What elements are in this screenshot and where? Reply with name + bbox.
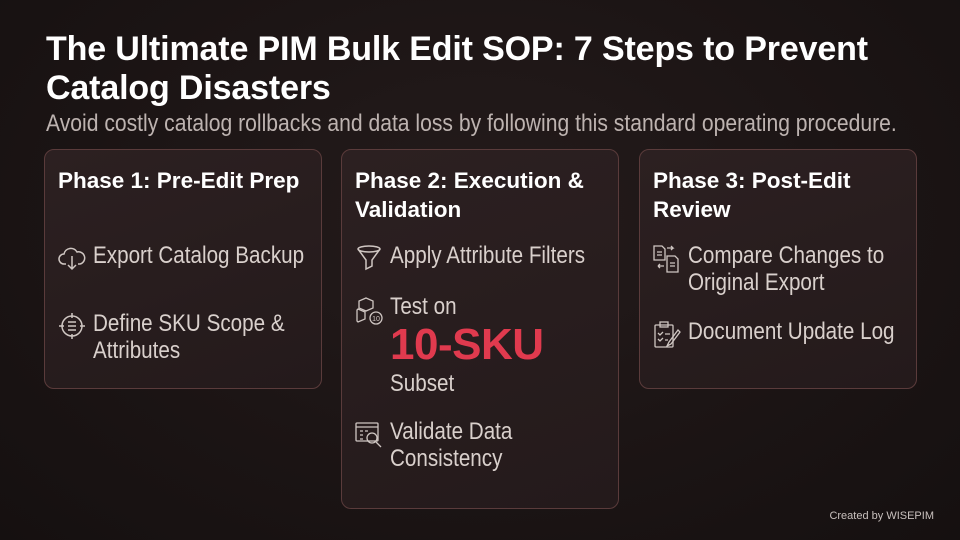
item: apply attribute filters: Apply Attribute Filters <box>390 242 585 269</box>
heading: phase 3 <box>653 168 851 222</box>
panel: phase 1 <box>44 149 322 389</box>
item: define sku scope: Attributes <box>93 337 180 364</box>
item: test on 10-SKU subset: Test on <box>390 293 457 320</box>
panel: phase 2 <box>341 149 619 509</box>
item: document update log: Document Update Log <box>688 318 895 345</box>
heading: phase 1: Phase 1: Pre-Edit Prep <box>58 168 299 193</box>
icon: target list <box>59 313 85 339</box>
item: validate data consistency <box>355 418 512 472</box>
heading: phase 3: Review <box>653 197 731 222</box>
item: define sku scope: Define SKU Scope & <box>93 310 285 337</box>
item: compare changes: Compare Changes to <box>688 242 884 269</box>
item: validate data consistency: Consistency <box>390 445 502 472</box>
icon: cloud download <box>58 248 86 270</box>
item: test on 10-SKU subset <box>356 293 544 397</box>
icon: compare documents <box>653 245 679 273</box>
item: export catalog backup: Export Catalog Backup <box>93 242 304 269</box>
credit: Created by WISEPIM <box>829 510 934 522</box>
item: compare changes <box>653 242 884 296</box>
icon: funnel <box>357 245 381 270</box>
icon: table magnifier <box>355 422 382 448</box>
item: test on 10-SKU subset: Subset <box>390 370 454 397</box>
icon: boxes 10 <box>356 297 383 325</box>
heading: phase 2: Phase 2: Execution & <box>355 168 584 193</box>
title: The Ultimate PIM Bulk Edit SOP: 7 Steps to Prevent <box>46 30 868 68</box>
title: Catalog Disasters <box>46 69 331 107</box>
subtitle: Avoid costly catalog rollbacks and data loss by following this standard operating procedure. <box>46 110 897 137</box>
icon: boxes 10: 10 <box>372 316 380 323</box>
title <box>46 30 868 107</box>
item: validate data consistency: Validate Data <box>390 418 512 445</box>
icon: clipboard pen <box>654 321 681 348</box>
item: compare changes: Original Export <box>688 269 825 296</box>
heading: phase 2 <box>355 168 584 222</box>
heading: phase 2: Validation <box>355 197 461 222</box>
item: define sku scope <box>59 310 285 364</box>
panel: phase 3 <box>639 149 917 389</box>
item: test on 10-SKU subset: 10-SKU <box>390 320 544 369</box>
heading: phase 3: Phase 3: Post-Edit <box>653 168 851 193</box>
